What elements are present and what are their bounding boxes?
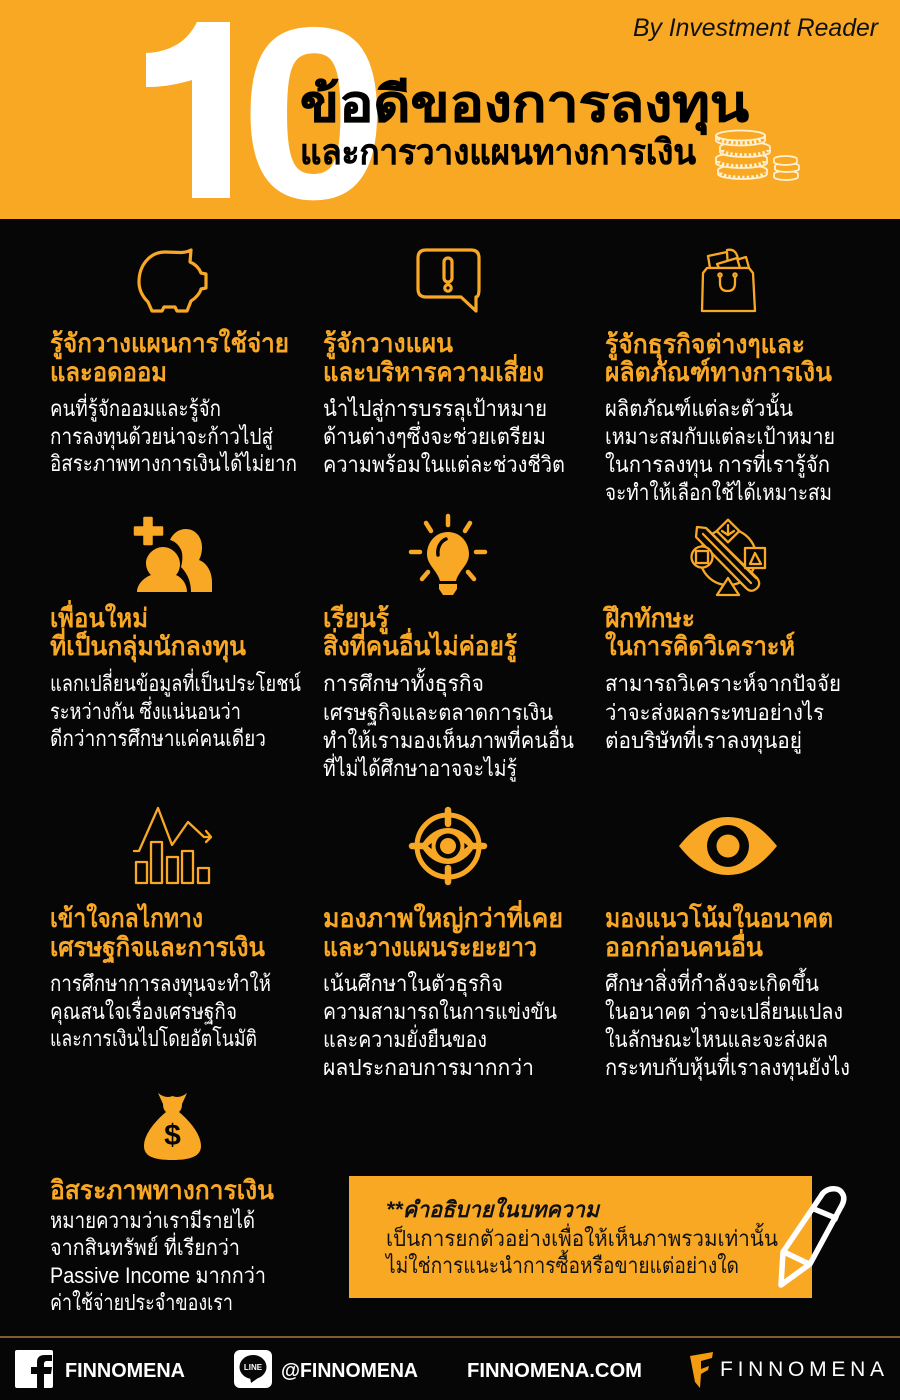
callout: disclaimer	[349, 1176, 844, 1298]
icon: pencil	[781, 1189, 844, 1285]
icon: alert speech bubble	[418, 250, 479, 311]
body text: ในลักษณะไหนและจะส่งผล	[605, 1027, 828, 1052]
body text	[323, 971, 557, 1080]
icon: bar chart with trend line	[134, 808, 211, 883]
body text	[50, 971, 271, 1051]
body text: หมายความว่าเรามีรายได้	[50, 1208, 255, 1233]
body text: การศึกษาทั้งธุรกิจ	[323, 668, 484, 697]
heading: ผลิตภัณฑ์ทางการเงิน	[605, 357, 832, 387]
body text: ต่อบริษัทที่เราลงทุนอยู่	[605, 725, 802, 754]
icon: facebook	[15, 1350, 53, 1388]
heading	[50, 599, 246, 663]
heading: ที่เป็นกลุ่มนักลงทุน	[50, 627, 246, 663]
body text: ผลประกอบการมากกว่า	[323, 1055, 534, 1080]
icon: eye	[679, 817, 777, 875]
panel: new friends	[50, 518, 301, 751]
body text: ที่ไม่ได้ศึกษาอาจจะไม่รู้	[323, 753, 517, 782]
website: FINNOMENA.COM	[467, 1360, 642, 1382]
heading: เพื่อนใหม่	[50, 599, 148, 633]
logo: FINNOMENA	[720, 1358, 884, 1381]
panel: economics	[50, 808, 271, 1051]
body text: ด้านต่างๆซึ่งจะช่วยเตรียม	[323, 421, 546, 449]
body text	[605, 671, 841, 754]
body text: ในอนาคต ว่าจะเปลี่ยนแปลง	[605, 996, 843, 1024]
callout text: ไม่ใช่การแนะนำการซื้อหรือขายแต่อย่างใด	[384, 1250, 739, 1278]
body text: ว่าจะส่งผลกระทบอย่างไร	[605, 700, 824, 725]
body text: การศึกษาการลงทุนจะทำให้	[50, 971, 271, 997]
heading: ในการคิดวิเคราะห์	[605, 631, 795, 661]
body text: Passive Income มากกว่า	[50, 1263, 266, 1288]
body text: ความพร้อมในแต่ละช่วงชีวิต	[323, 452, 565, 477]
body text	[323, 668, 574, 782]
heading	[323, 328, 544, 387]
body text: นำไปสู่การบรรลุเป้าหมาย	[323, 396, 547, 422]
heading	[50, 902, 265, 965]
body text	[323, 396, 565, 477]
callout text: **คำอธิบายในบทความ	[386, 1196, 600, 1222]
heading: เข้าใจกลไกทาง	[50, 902, 203, 933]
panel: risk	[323, 250, 565, 477]
heading	[603, 603, 795, 661]
panel: trends	[605, 817, 850, 1081]
heading	[605, 902, 833, 962]
heading: และวางแผนระยะยาว	[323, 932, 537, 962]
icon: money bag	[144, 1093, 201, 1160]
heading: รู้จักธุรกิจต่างๆและ	[605, 329, 805, 361]
heading: และบริหารความเสี่ยง	[323, 353, 544, 387]
footer	[0, 1336, 900, 1388]
body text: อิสระภาพทางการเงินได้ไม่ยาก	[50, 451, 297, 476]
panel: learning	[323, 516, 574, 782]
logo	[690, 1352, 884, 1388]
heading: เรียนรู้	[323, 603, 389, 635]
body text: การลงทุนด้วยน่าจะก้าวไปสู่	[50, 424, 273, 450]
title line 2: และการวางแผนทางการเงิน	[300, 133, 696, 172]
heading: และอดออม	[50, 357, 167, 387]
body text: ค่าใช้จ่ายประจำของเรา	[50, 1290, 233, 1315]
body text: จากสินทรัพย์ ที่เรียกว่า	[50, 1232, 240, 1260]
callout text	[384, 1196, 778, 1278]
callout text: เป็นการยกตัวอย่างเพื่อให้เห็นภาพรวมเท่านั้น	[386, 1223, 778, 1251]
body text: ทำให้เรามองเห็นภาพที่คนอื่น	[323, 725, 574, 753]
body text	[605, 393, 835, 505]
icon: light bulb	[411, 516, 485, 595]
body text: และการเงินไปโดยอัตโนมัติ	[50, 1026, 257, 1051]
body text: เน้นศึกษาในตัวธุรกิจ	[323, 971, 503, 997]
panel: big picture	[323, 810, 563, 1080]
heading: มองภาพใหญ่กว่าที่เคย	[323, 899, 563, 934]
panel: products	[605, 250, 835, 505]
body text: สามารถวิเคราะห์จากปัจจัย	[605, 671, 841, 696]
byline: By Investment Reader	[633, 14, 880, 42]
body text: คุณสนใจเรื่องเศรษฐกิจ	[50, 996, 237, 1025]
heading: ฝึกทักษะ	[603, 603, 695, 633]
panel: analysis	[603, 520, 841, 754]
panel: financial freedom	[50, 1093, 274, 1315]
body text: คนที่รู้จักออมและรู้จัก	[50, 393, 221, 422]
body text	[50, 1208, 266, 1315]
icon: people with plus	[135, 518, 212, 592]
icon: analysis tools	[692, 520, 765, 595]
body text: เศรษฐกิจและตลาดการเงิน	[323, 700, 553, 726]
heading: อิสระภาพทางการเงิน	[50, 1175, 274, 1205]
icon: shopping bag	[702, 250, 755, 311]
header banner	[0, 0, 900, 250]
icon: line	[234, 1350, 272, 1388]
body text	[50, 393, 297, 476]
panel: saving	[50, 250, 297, 476]
heading	[323, 603, 517, 663]
heading: เศรษฐกิจและการเงิน	[50, 932, 265, 965]
icon: money bag: $	[164, 1119, 181, 1152]
heading: รู้จักวางแผนการใช้จ่าย	[50, 328, 289, 360]
body text: และความยั่งยืนของ	[323, 1024, 487, 1052]
heading	[605, 329, 832, 387]
icon: coins	[716, 130, 799, 180]
body text: ผลิตภัณฑ์แต่ละตัวนั้น	[605, 393, 793, 421]
heading	[323, 899, 563, 962]
body text: ความสามารถในการแข่งขัน	[323, 999, 557, 1024]
body text: กระทบกับหุ้นที่เราลงทุนยังไง	[605, 1052, 850, 1081]
body text: ดีกว่าการศึกษาแค่คนเดียว	[50, 726, 266, 751]
icon: line: LINE	[244, 1363, 263, 1372]
heading: ออกก่อนคนอื่น	[605, 928, 763, 962]
body text	[605, 968, 850, 1081]
body text: ศึกษาสิ่งที่กำลังจะเกิดขึ้น	[605, 968, 819, 996]
body text: ระหว่างกัน ซึ่งแน่นอนว่า	[50, 696, 241, 724]
title line 1: ข้อดีของการลงทุน	[300, 76, 749, 135]
heading: รู้จักวางแผน	[323, 328, 453, 360]
heading	[50, 328, 289, 387]
body text	[50, 668, 301, 751]
facebook name: FINNOMENA	[65, 1360, 185, 1382]
icon: eye target	[412, 810, 484, 882]
body text: ในการลงทุน การที่เรารู้จัก	[605, 449, 830, 478]
heading: สิ่งที่คนอื่นไม่ค่อยรู้	[323, 627, 517, 663]
body text: จะทำให้เลือกใช้ได้เหมาะสม	[605, 480, 832, 505]
line handle: @FINNOMENA	[281, 1360, 418, 1382]
heading: มองแนวโน้มในอนาคต	[605, 902, 833, 933]
body text: แลกเปลี่ยนข้อมูลที่เป็นประโยชน์	[50, 668, 301, 697]
body text: เหมาะสมกับแต่ละเป้าหมาย	[605, 424, 835, 449]
icon: piggy bank	[139, 250, 206, 311]
